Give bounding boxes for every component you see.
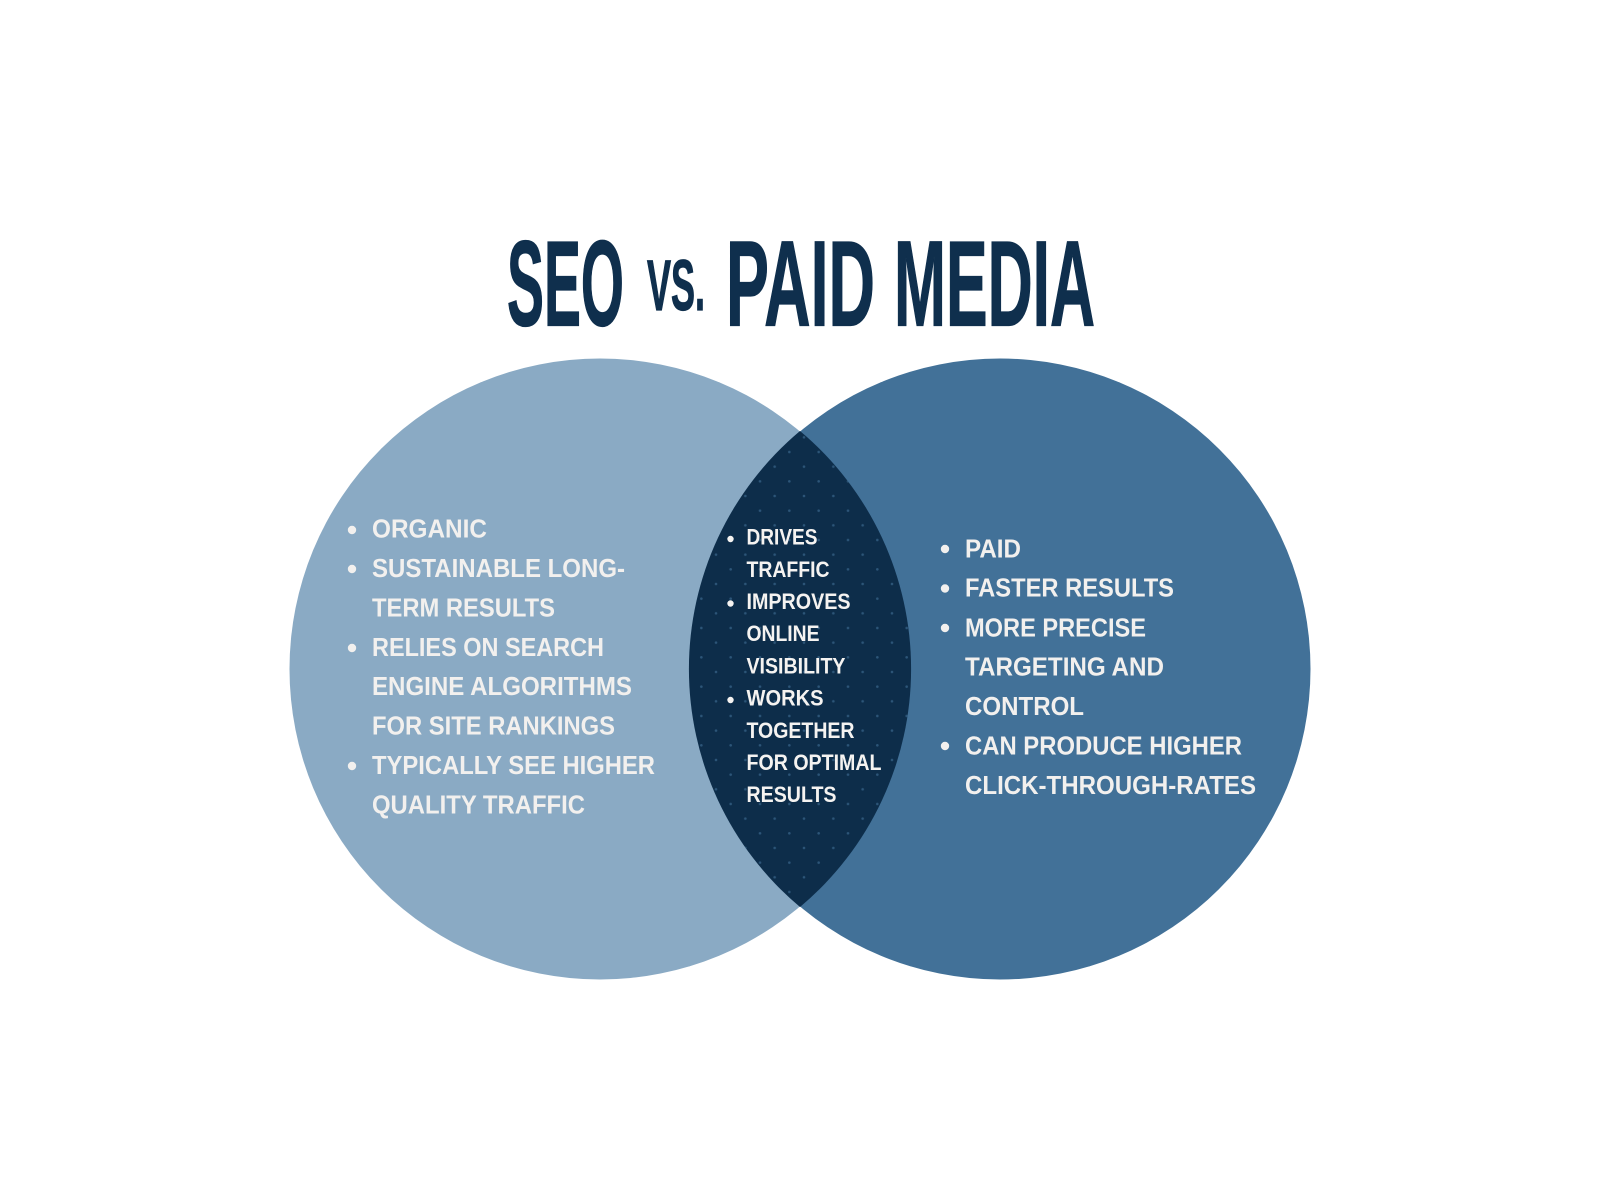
list: shared traits: RESULTS — [746, 782, 836, 807]
list: paid media traits — [941, 534, 1256, 800]
list: paid media traits: FASTER RESULTS — [965, 573, 1174, 603]
list: shared traits: FOR OPTIMAL — [746, 750, 882, 775]
list: SEO traits: FOR SITE RANKINGS — [372, 711, 615, 741]
list: SEO traits: SUSTAINABLE LONG- — [372, 553, 625, 583]
list: shared traits: IMPROVES — [746, 589, 850, 614]
list: shared traits: VISIBILITY — [746, 653, 846, 678]
list: SEO traits: ORGANIC — [372, 514, 487, 544]
title: SEO — [507, 216, 624, 352]
list: shared traits: ONLINE — [746, 621, 820, 646]
list: SEO traits: RELIES ON SEARCH — [372, 632, 604, 662]
list: shared traits: DRIVES — [746, 525, 818, 550]
title: VS. — [647, 247, 705, 326]
list: SEO traits: TERM RESULTS — [372, 592, 555, 622]
list: shared traits: TRAFFIC — [746, 557, 830, 582]
list: paid media traits: CLICK-THROUGH-RATES — [965, 770, 1256, 800]
list: paid media traits: MORE PRECISE — [965, 612, 1146, 642]
list: paid media traits: CAN PRODUCE HIGHER — [965, 730, 1242, 760]
list: SEO traits: QUALITY TRAFFIC — [372, 789, 585, 819]
list: SEO traits: TYPICALLY SEE HIGHER — [372, 750, 655, 780]
list: SEO traits — [348, 514, 655, 819]
list: shared traits: WORKS — [746, 686, 824, 711]
title: PAID — [726, 216, 875, 352]
overlap lens — [689, 431, 911, 907]
title: MEDIA — [894, 216, 1095, 352]
title — [507, 216, 1095, 352]
circle: SEO — [290, 358, 910, 980]
list: paid media traits: PAID — [965, 534, 1021, 564]
circle: paid media — [690, 358, 1310, 980]
list: shared traits — [727, 525, 882, 807]
list: paid media traits: CONTROL — [965, 691, 1084, 721]
list: shared traits: TOGETHER — [746, 718, 855, 743]
list: SEO traits: ENGINE ALGORITHMS — [372, 671, 632, 701]
list: paid media traits: TARGETING AND — [965, 652, 1164, 682]
